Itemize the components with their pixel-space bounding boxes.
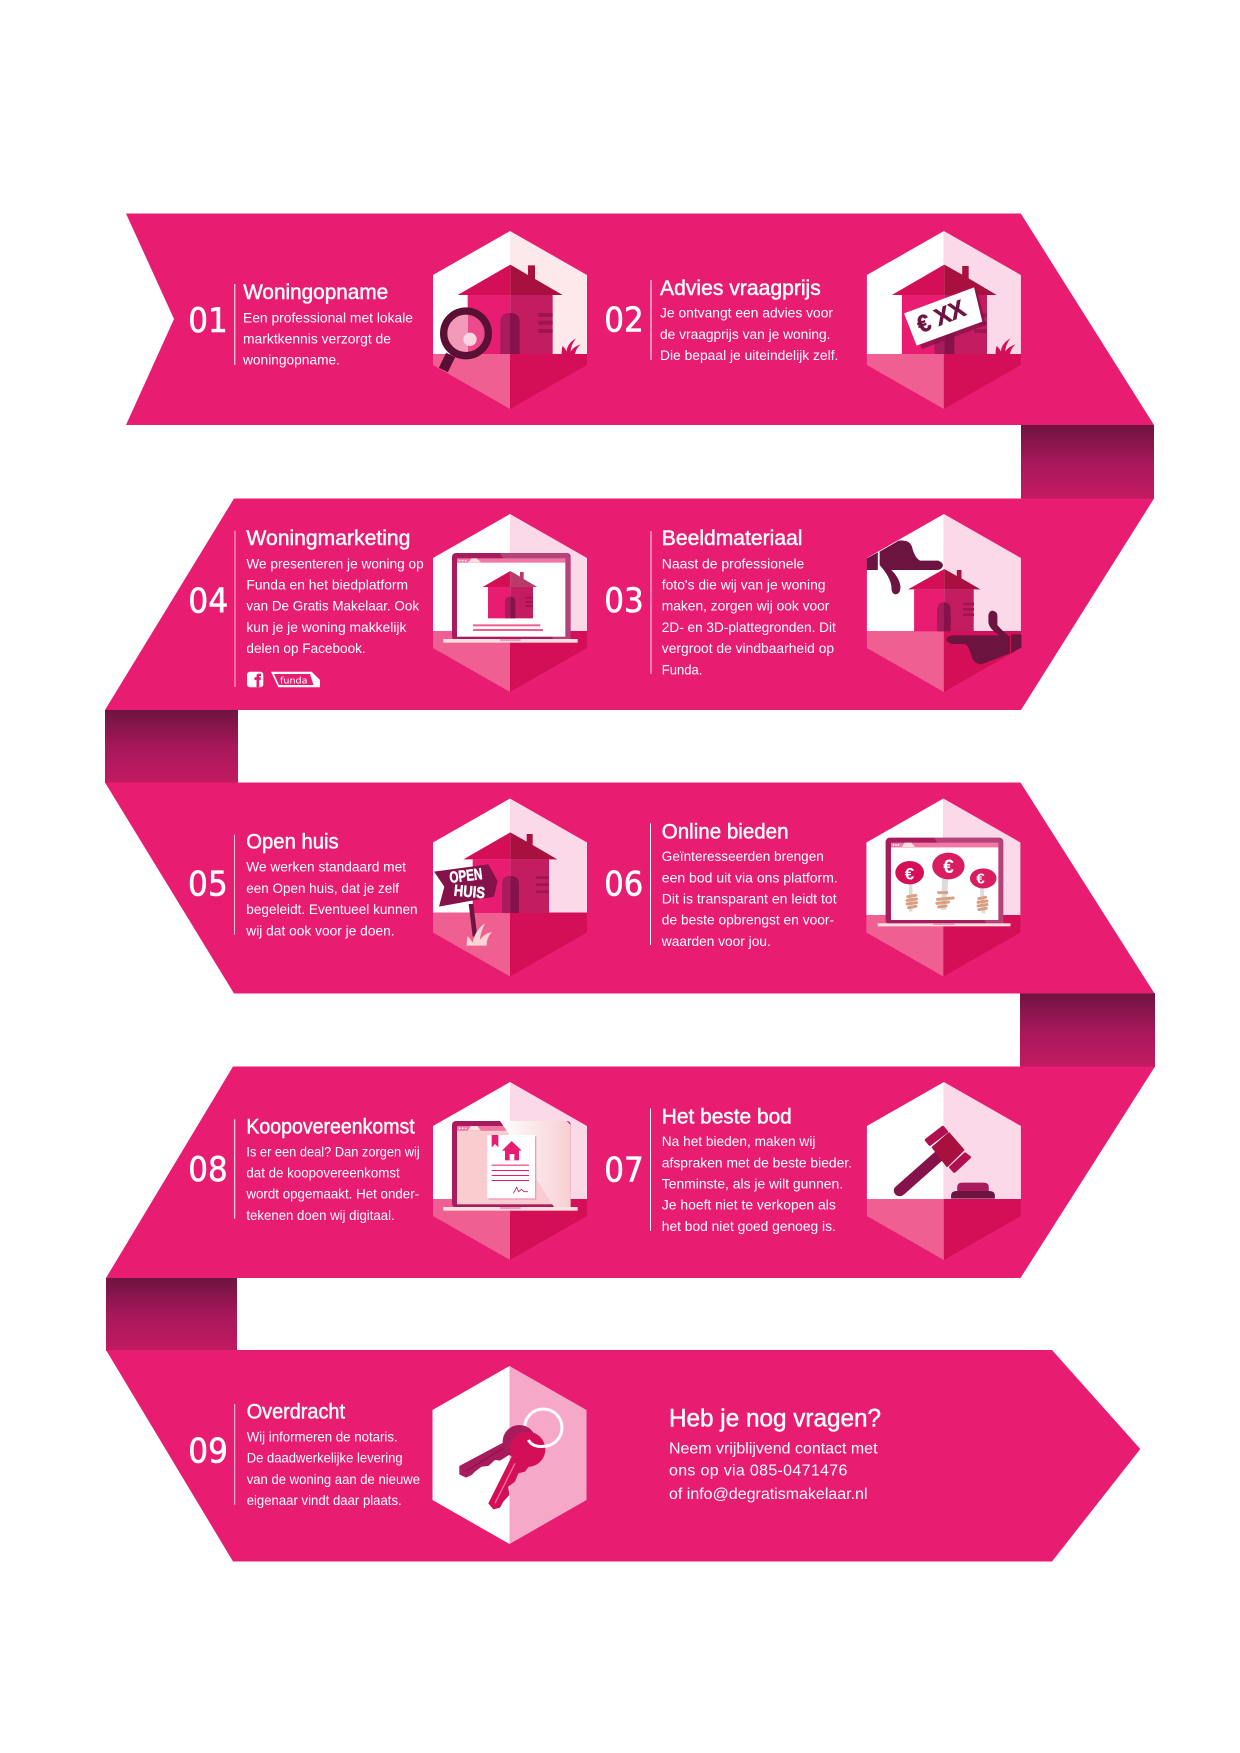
number 07: 07 bbox=[604, 1151, 644, 1191]
text block: maken, zorgen wij ook voor bbox=[662, 598, 830, 614]
icon: house framed by hands bbox=[867, 514, 1021, 692]
divider bbox=[234, 284, 235, 365]
number 05: 05 bbox=[188, 865, 228, 905]
number 01: 01 bbox=[188, 301, 228, 341]
icon: funda logo: funda bbox=[280, 676, 308, 686]
divider bbox=[650, 280, 652, 360]
text block: kun je je woning makkelijk bbox=[246, 619, 407, 635]
text block bbox=[662, 555, 836, 678]
text block bbox=[661, 848, 838, 949]
step 03 bbox=[604, 514, 1021, 692]
panel: ribbon row 5 bbox=[106, 1350, 1140, 1562]
panel: ribbon row 4 bbox=[106, 1066, 1155, 1278]
text block: begeleidt. Eventueel kunnen bbox=[246, 901, 418, 917]
icon: laptop with contract bbox=[433, 1082, 587, 1260]
text block: Een professional met lokale bbox=[243, 309, 413, 325]
number 04: 04 bbox=[188, 582, 228, 622]
divider bbox=[234, 1119, 235, 1219]
step 06 bbox=[604, 798, 1020, 976]
ribbon fold 2 bbox=[105, 710, 238, 783]
divider bbox=[650, 823, 651, 945]
icon: funda logo bbox=[271, 672, 320, 687]
heading: Overdracht bbox=[247, 1400, 345, 1423]
step 07 bbox=[604, 1082, 1021, 1260]
text block: woningopname. bbox=[242, 352, 340, 368]
number 09: 09 bbox=[188, 1432, 228, 1472]
text block: Dit is transparant en leidt tot bbox=[662, 890, 837, 906]
icon: keys bbox=[432, 1366, 586, 1544]
step 04 bbox=[188, 514, 587, 692]
text block: Wij informeren de notaris. bbox=[247, 1428, 398, 1444]
text block: dat de koopovereenkomst bbox=[246, 1164, 400, 1180]
text block bbox=[245, 859, 418, 938]
text block: Funda. bbox=[662, 662, 702, 678]
icon: laptop with house bbox=[433, 514, 587, 692]
icon: laptop with bidding paddles: € bbox=[976, 870, 985, 888]
text block: de vraagprijs van je woning. bbox=[660, 326, 830, 342]
heading: Woningopname bbox=[243, 281, 388, 304]
band bbox=[105, 782, 1154, 994]
contact text: Neem vrijblijvend contact met bbox=[669, 1440, 878, 1457]
text block: de beste opbrengst en voor- bbox=[662, 912, 834, 928]
text block: 2D- en 3D-plattegronden. Dit bbox=[662, 619, 836, 635]
text block: De daadwerkelijke levering bbox=[247, 1450, 403, 1466]
ribbon fold 1 bbox=[1021, 425, 1154, 499]
text block: We werken standaard met bbox=[246, 859, 406, 875]
text block: delen op Facebook. bbox=[246, 640, 366, 656]
number 02: 02 bbox=[604, 301, 644, 341]
divider bbox=[234, 835, 235, 935]
contact text bbox=[669, 1440, 878, 1503]
panel: ribbon row 1 bbox=[126, 214, 1154, 425]
heading: Open huis bbox=[246, 830, 339, 853]
text block: Naast de professionele bbox=[662, 555, 805, 571]
divider bbox=[650, 1108, 651, 1231]
panel: ribbon row 3 bbox=[105, 782, 1154, 994]
divider bbox=[650, 531, 652, 674]
icon: laptop with bidding paddles: € bbox=[905, 864, 915, 884]
heading: Beeldmateriaal bbox=[662, 527, 802, 550]
text block: Je hoeft niet te verkopen als bbox=[662, 1197, 836, 1213]
text block: Geïnteresseerden brengen bbox=[662, 848, 824, 864]
contact heading: Heb je nog vragen? bbox=[669, 1405, 881, 1433]
text block bbox=[660, 305, 838, 363]
icon: house with open house sign: HUIS bbox=[453, 883, 486, 902]
text block: We presenteren je woning op bbox=[246, 555, 424, 571]
text block: van de woning aan de nieuwe bbox=[247, 1471, 420, 1487]
text block: vergroot de vindbaarheid op bbox=[662, 640, 834, 656]
text block bbox=[246, 555, 424, 656]
text block bbox=[662, 1133, 852, 1234]
icon: laptop with bidding paddles bbox=[866, 798, 1020, 976]
text block: wordt opgemaakt. Het onder- bbox=[245, 1186, 419, 1202]
icon: laptop with bidding paddles: € bbox=[943, 857, 954, 878]
panel: ribbon row 2 bbox=[105, 498, 1154, 710]
text block: waarden voor jou. bbox=[661, 933, 771, 949]
text block: Funda en het biedplatform bbox=[246, 576, 408, 592]
text block: Na het bieden, maken wij bbox=[662, 1133, 815, 1149]
text block: marktkennis verzorgt de bbox=[243, 330, 391, 346]
band bbox=[106, 1066, 1155, 1278]
heading: Woningmarketing bbox=[246, 527, 410, 550]
divider bbox=[234, 531, 236, 687]
text block: afspraken met de beste bieder. bbox=[662, 1154, 852, 1170]
text block bbox=[247, 1428, 420, 1508]
text block: een Open huis, dat je zelf bbox=[246, 880, 399, 896]
heading: Koopovereenkomst bbox=[246, 1115, 415, 1138]
text block: foto's die wij van je woning bbox=[662, 576, 826, 592]
text block: een bod uit via ons platform. bbox=[662, 869, 838, 885]
contact text: of info@degratismakelaar.nl bbox=[669, 1486, 868, 1503]
number 06: 06 bbox=[604, 865, 643, 905]
text block: Is er een deal? Dan zorgen wij bbox=[246, 1143, 420, 1159]
ribbon fold 3 bbox=[1020, 993, 1155, 1067]
icon: house with open house sign: OPEN bbox=[449, 866, 483, 887]
divider bbox=[234, 1404, 235, 1505]
step 08 bbox=[188, 1082, 587, 1260]
text block: Je ontvangt een advies voor bbox=[660, 305, 833, 321]
band bbox=[126, 214, 1154, 425]
icon: house with open house sign bbox=[433, 798, 587, 976]
text block bbox=[242, 309, 413, 368]
heading: Het beste bod bbox=[662, 1105, 792, 1128]
icon: auction gavel bbox=[867, 1082, 1021, 1260]
text block: het bod niet goed genoeg is. bbox=[662, 1218, 836, 1234]
step 09 bbox=[188, 1366, 587, 1544]
heading: Online bieden bbox=[662, 820, 788, 843]
text block: Die bepaal je uiteindelijk zelf. bbox=[660, 347, 838, 363]
icon: facebook bbox=[247, 672, 263, 687]
ribbon fold 4 bbox=[106, 1278, 237, 1351]
band bbox=[106, 1350, 1140, 1562]
text block: wij dat ook voor je doen. bbox=[245, 922, 395, 938]
heading: Advies vraagprijs bbox=[660, 277, 821, 300]
text block bbox=[245, 1143, 420, 1223]
contact block bbox=[669, 1405, 881, 1503]
text block: tekenen doen wij digitaal. bbox=[246, 1207, 395, 1223]
text block: Tenminste, als je wilt gunnen. bbox=[662, 1176, 843, 1192]
text block: eigenaar vindt daar plaats. bbox=[247, 1492, 402, 1508]
text block: van De Gratis Makelaar. Ook bbox=[246, 598, 420, 614]
icon: house with magnifier bbox=[433, 231, 587, 409]
step 05 bbox=[188, 798, 587, 976]
band bbox=[105, 498, 1154, 710]
step 02 bbox=[604, 231, 1021, 409]
step 01 bbox=[188, 231, 587, 409]
icon: house with price tag bbox=[867, 231, 1021, 409]
number 03: 03 bbox=[604, 581, 644, 621]
number 08: 08 bbox=[188, 1150, 228, 1190]
contact text: ons op via 085-0471476 bbox=[669, 1463, 847, 1480]
icon: house with price tag: € XX bbox=[913, 295, 969, 339]
